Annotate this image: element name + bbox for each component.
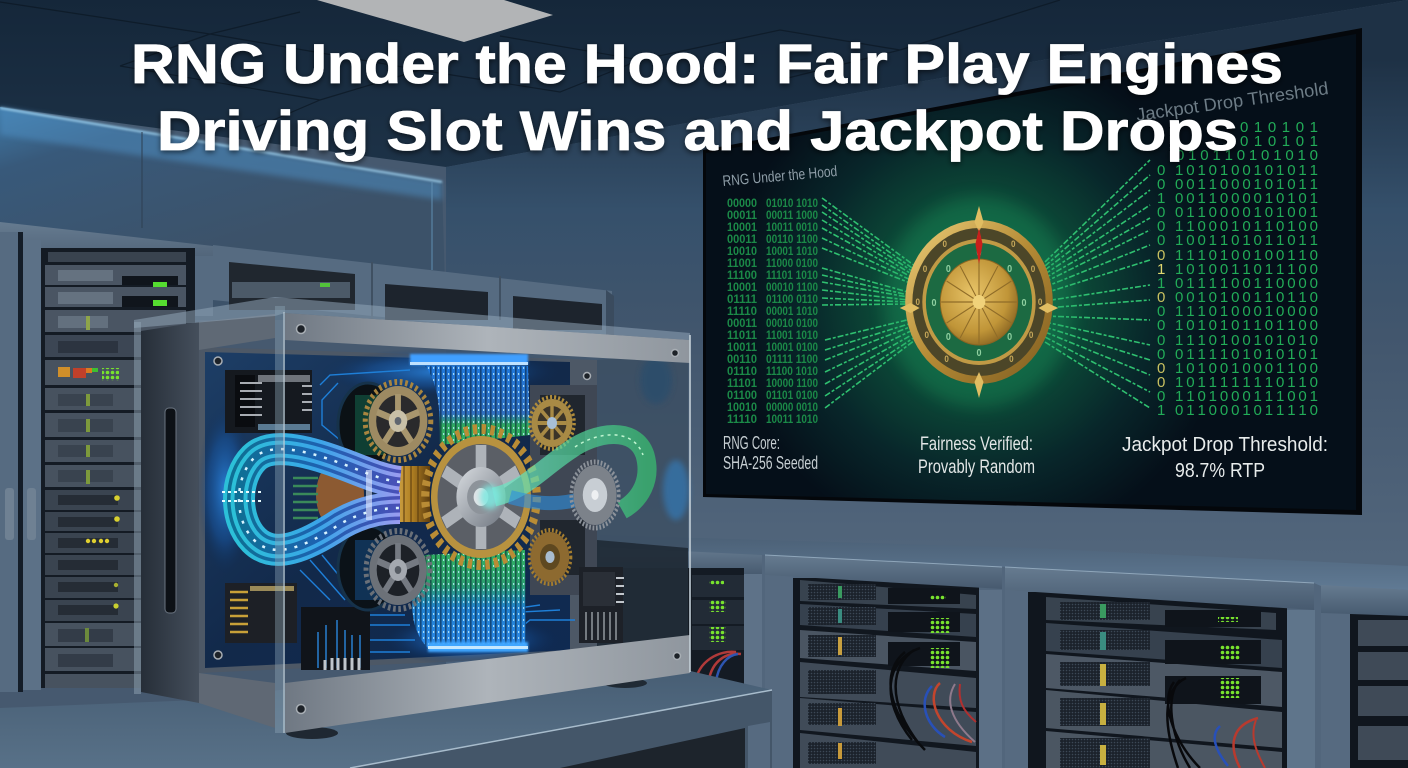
right binary matrix: 0 1 1 0 0 0 0 1 0 1 0 0 1 bbox=[1175, 204, 1318, 221]
left binary matrix: 00010 1100 bbox=[766, 280, 818, 294]
right binary matrix: 0 0 1 1 0 0 0 1 0 1 0 1 1 bbox=[1175, 176, 1318, 193]
right binary matrix: 0 bbox=[1157, 204, 1165, 221]
right binary matrix: 1 bbox=[1157, 402, 1165, 419]
server units bbox=[45, 265, 186, 688]
right binary matrix: 0 bbox=[1157, 218, 1165, 235]
left binary matrix: 01111 1100 bbox=[766, 352, 818, 366]
cove light strip bbox=[0, 108, 442, 182]
right binary matrix: 0 1 1 0 0 0 1 0 1 1 1 1 0 bbox=[1175, 402, 1318, 419]
right binary matrix: 1 1 0 1 0 0 0 1 1 1 0 0 1 bbox=[1175, 388, 1318, 405]
title: Driving Slot Wins and Jackpot Drops bbox=[157, 99, 1238, 162]
ceiling bbox=[0, 0, 1408, 167]
right binary matrix: 1 1 0 0 0 1 0 1 1 0 1 0 0 bbox=[1175, 218, 1318, 235]
data beams left bbox=[822, 198, 915, 408]
acrylic top plate bbox=[134, 297, 690, 340]
left binary matrix: 10001 bbox=[727, 280, 757, 294]
rack 3 lintel bbox=[1005, 567, 1314, 610]
left binary matrix: 01111 bbox=[727, 292, 757, 306]
cove light glow bbox=[0, 107, 442, 200]
title: RNG Under the Hood: Fair Play Engines bbox=[131, 32, 1283, 95]
gold roulette wheel: 0 bbox=[1029, 330, 1034, 340]
ribbon: left cyan loop bbox=[222, 449, 400, 550]
left binary matrix: 11101 bbox=[727, 376, 757, 390]
copper gear and gold drum behind ribbon bbox=[293, 459, 430, 531]
left binary matrix: 11011 bbox=[727, 328, 757, 342]
right binary matrix: 0 1 1 1 1 0 0 1 1 0 0 0 0 bbox=[1175, 275, 1318, 292]
gold roulette wheel bbox=[900, 206, 1058, 398]
left binary matrix: 00011 bbox=[727, 316, 757, 330]
right server racks bbox=[600, 535, 1408, 768]
case bottom steel bar bbox=[285, 635, 690, 733]
monitor screen bbox=[706, 34, 1356, 510]
left wall bbox=[0, 107, 446, 320]
data bundle: top bbox=[410, 354, 530, 445]
gold roulette wheel: 0 bbox=[943, 239, 947, 249]
gear: shadow drum upper bbox=[338, 383, 398, 467]
right binary matrix: 0 bbox=[1157, 289, 1165, 306]
right binary matrix: 0 bbox=[1157, 374, 1165, 391]
right binary matrix: 1 0 1 0 1 0 1 1 0 1 1 0 0 bbox=[1175, 317, 1318, 334]
left binary matrix: 01100 0110 bbox=[766, 292, 818, 306]
left binary matrix: 00000 bbox=[727, 196, 757, 210]
left binary matrix: 11100 bbox=[727, 268, 757, 282]
wall monitor bbox=[703, 28, 1362, 515]
gold roulette wheel: 0 bbox=[1009, 354, 1014, 364]
right binary matrix: 1 0 1 0 0 1 1 0 1 1 1 0 0 bbox=[1175, 261, 1318, 278]
case right see-through area bbox=[597, 352, 688, 655]
right binary matrix: 0 bbox=[1157, 346, 1165, 363]
panel handle slot bbox=[165, 408, 176, 613]
rack 1 behind case bbox=[600, 547, 762, 698]
left binary matrix: 11001 bbox=[727, 256, 757, 270]
wheel diamond pins bbox=[900, 206, 1058, 398]
left binary matrix: 10000 1100 bbox=[766, 376, 818, 390]
right binary matrix: 0 bbox=[1157, 388, 1165, 405]
rack lintel bbox=[0, 222, 213, 275]
right binary matrix: 1 bbox=[1157, 261, 1165, 278]
caption: RNG Core: RNG Core: bbox=[723, 433, 780, 453]
right binary matrix: 0 1 0 1 0 1 bbox=[1240, 133, 1318, 150]
left binary matrix: 00110 1100 bbox=[766, 232, 818, 246]
rack 2 lintel bbox=[765, 555, 1002, 589]
right binary matrix: 0 bbox=[1157, 247, 1165, 264]
gold roulette wheel: 0 bbox=[916, 297, 920, 307]
left server rack bbox=[0, 222, 213, 692]
gold roulette wheel: 0 bbox=[976, 248, 982, 259]
ribbon: right green loop bbox=[494, 434, 647, 510]
right binary matrix: 0 bbox=[1157, 360, 1165, 377]
left binary matrix: 11101 1010 bbox=[766, 268, 818, 282]
hub light bbox=[480, 485, 500, 509]
rack 4 bbox=[1321, 585, 1408, 768]
rack 2 pillars bbox=[765, 575, 793, 768]
gold roulette wheel: 0 bbox=[976, 348, 982, 359]
gold roulette wheel: 0 bbox=[944, 354, 949, 364]
acrylic left edge bbox=[134, 322, 141, 694]
left binary matrix: 00000 0010 bbox=[766, 400, 818, 414]
left binary matrix: 00110 bbox=[727, 352, 757, 366]
right binary matrix: 1 1 1 0 1 0 0 0 1 0 0 0 0 bbox=[1175, 303, 1318, 320]
left binary matrix: 01110 bbox=[727, 364, 757, 378]
left binary matrix: 00011 bbox=[727, 208, 757, 222]
gear: small lower gold bbox=[529, 530, 571, 584]
rack 2 bbox=[765, 555, 1002, 768]
gold roulette wheel: 0 bbox=[977, 233, 981, 243]
right binary matrix: 1 bbox=[1157, 190, 1165, 207]
data bundle: bottom bbox=[412, 550, 528, 652]
right binary matrix: 0 bbox=[1157, 232, 1165, 249]
rack 3 pillars bbox=[1005, 590, 1028, 768]
left binary matrix: 00011 1000 bbox=[766, 208, 818, 222]
caption: RNG Core bbox=[723, 433, 818, 473]
left binary matrix: 10011 1010 bbox=[766, 412, 818, 426]
screen heading: RNG Under the Hood bbox=[722, 163, 838, 190]
rack 3 bbox=[1005, 567, 1315, 768]
left binary matrix: 01100 bbox=[727, 388, 757, 402]
screen ghost label: Jackpot Drop Threshold bbox=[1135, 78, 1330, 125]
caption: jackpot threshold bbox=[1122, 434, 1328, 482]
monitor bezel bbox=[703, 28, 1362, 515]
case top steel bar bbox=[285, 313, 690, 363]
left binary matrix: 10010 bbox=[727, 244, 757, 258]
left binary matrix: 00011 bbox=[727, 232, 757, 246]
gear: lower silver bbox=[366, 531, 430, 609]
chip: lower left bbox=[225, 583, 297, 643]
left binary matrix: 10001 1010 bbox=[766, 244, 818, 258]
left binary matrix bbox=[727, 196, 818, 426]
title bbox=[131, 32, 1283, 162]
right binary matrix: 1 0 1 0 1 0 0 1 0 1 0 1 1 bbox=[1175, 162, 1318, 179]
right binary matrix: 0 bbox=[1157, 162, 1165, 179]
left binary matrix: 10001 0100 bbox=[766, 340, 818, 354]
right binary matrix: 1 0 0 1 1 0 1 0 1 1 0 1 1 bbox=[1175, 232, 1318, 249]
right binary matrix: 0 bbox=[1157, 317, 1165, 334]
left binary matrix: 10010 bbox=[727, 400, 757, 414]
left binary matrix: 10011 bbox=[727, 340, 757, 354]
chip: top left bbox=[225, 370, 312, 433]
rack tops bbox=[600, 535, 1408, 590]
case interior back bbox=[199, 347, 597, 673]
right binary matrix bbox=[1157, 119, 1318, 419]
acrylic front edge bbox=[275, 306, 285, 733]
gold roulette wheel: 0 bbox=[1031, 264, 1035, 274]
chip: right bbox=[579, 567, 624, 643]
gold roulette wheel: 0 bbox=[1021, 298, 1027, 309]
gear: shadow drum lower bbox=[338, 526, 398, 610]
gear: main gold bbox=[425, 429, 537, 565]
right binary matrix: 0 bbox=[1157, 176, 1165, 193]
glass server case bbox=[134, 297, 690, 733]
caption: jackpot threshold: Jackpot Drop Threshold: bbox=[1122, 434, 1328, 456]
case left steel panel bbox=[141, 322, 199, 703]
gold roulette wheel: 0 bbox=[1038, 297, 1043, 307]
data beams right bbox=[1045, 160, 1150, 408]
left binary matrix: 01101 0100 bbox=[766, 388, 818, 402]
left binary matrix: 11110 bbox=[727, 304, 757, 318]
gear: silver right bbox=[571, 462, 619, 528]
right binary matrix: 1 bbox=[1157, 275, 1165, 292]
wheel glow bbox=[884, 197, 1074, 407]
right binary matrix: 1 1 1 0 1 0 0 1 0 0 1 1 0 bbox=[1175, 247, 1318, 264]
left binary matrix: 00001 1010 bbox=[766, 304, 818, 318]
gold roulette wheel: 0 bbox=[1011, 239, 1016, 249]
rear server racks bbox=[213, 245, 614, 345]
left binary matrix: 11001 1010 bbox=[766, 328, 818, 342]
left binary matrix: 10011 0010 bbox=[766, 220, 818, 234]
left binary matrix: 11100 1010 bbox=[766, 364, 818, 378]
right binary matrix: 0 0 1 0 1 0 0 1 1 0 1 1 0 bbox=[1175, 289, 1318, 306]
caption: fairness verified: Fairness Verified: bbox=[920, 434, 1033, 455]
chip: bottom centre bbox=[301, 607, 370, 670]
gold roulette wheel: 0 bbox=[923, 264, 927, 274]
ceiling light panel bbox=[317, 0, 553, 42]
gold roulette wheel: 0 bbox=[946, 264, 951, 275]
gold roulette wheel: 0 bbox=[1007, 332, 1012, 343]
right binary matrix: 0 bbox=[1157, 332, 1165, 349]
rear right wall bbox=[446, 0, 1408, 768]
right binary matrix: 1 0 1 1 1 1 1 1 1 0 1 1 0 bbox=[1175, 374, 1318, 391]
left binary matrix: 11000 0100 bbox=[766, 256, 818, 270]
right binary matrix: 0 1 1 1 1 0 1 0 1 0 1 0 1 bbox=[1175, 346, 1318, 363]
left binary matrix: 00010 0100 bbox=[766, 316, 818, 330]
left binary matrix: 01010 1010 bbox=[766, 196, 818, 210]
circuit traces bbox=[300, 370, 575, 652]
right binary matrix: 1 1 1 0 1 0 0 1 0 1 0 1 0 bbox=[1175, 332, 1318, 349]
bolts bbox=[214, 324, 680, 714]
right binary matrix: 0 0 1 1 0 0 0 0 1 0 1 0 1 bbox=[1175, 190, 1318, 207]
left binary matrix: 11110 bbox=[727, 412, 757, 426]
gear: small top gold bbox=[530, 397, 574, 449]
gold roulette wheel: 0 bbox=[946, 332, 951, 343]
gold roulette wheel: 0 bbox=[931, 298, 937, 309]
gold roulette wheel: 0 bbox=[925, 330, 929, 340]
left binary matrix: 10001 bbox=[727, 220, 757, 234]
right binary matrix: 0 1 0 1 0 1 bbox=[1240, 119, 1318, 136]
pedestal table bbox=[0, 650, 772, 768]
right binary matrix: 0 1 0 1 1 0 1 0 1 0 1 0 bbox=[1176, 147, 1318, 164]
right binary matrix: 0 bbox=[1157, 303, 1165, 320]
gold roulette wheel: 0 bbox=[1007, 264, 1012, 275]
rack interior bbox=[41, 248, 195, 688]
caption: fairness verified bbox=[918, 434, 1035, 478]
right binary matrix: 1 0 1 0 0 1 0 0 0 1 1 0 0 bbox=[1175, 360, 1318, 377]
gear: top gold bbox=[365, 382, 431, 460]
caption: RNG Core: SHA-256 Seeded bbox=[723, 453, 818, 473]
caption: fairness verified: Provably Random bbox=[918, 457, 1035, 478]
red pointer bbox=[975, 228, 983, 264]
caption: jackpot threshold: 98.7% RTP bbox=[1175, 460, 1265, 482]
